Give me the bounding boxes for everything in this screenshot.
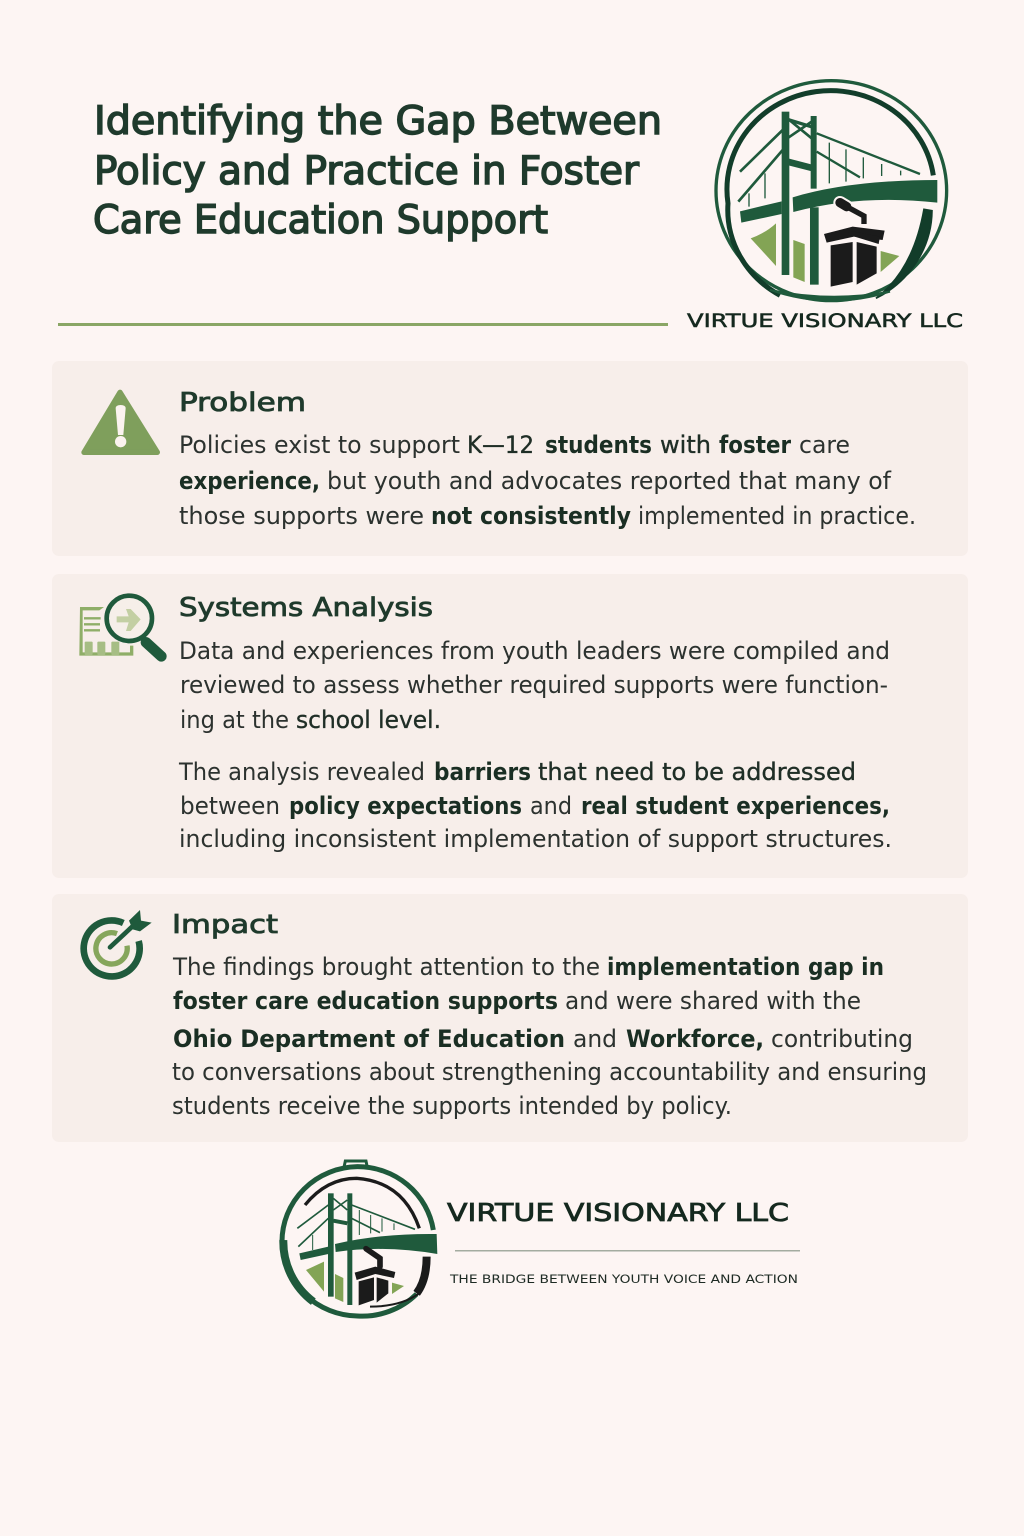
heading: impact: Impact [172,910,278,940]
title: Identifying the Gap Between [94,99,662,144]
systems analysis text: reviewed to assess whether required supports were function- [180,671,888,699]
panel: systems analysis [52,574,968,878]
logo wordmark: VIRTUE VISIONARY LLC [687,310,963,332]
impact text: Ohio Department of Education [173,1025,565,1053]
title: Policy and Practice in Foster [94,149,640,194]
systems analysis text: policy expectations [289,792,522,820]
icon: magnifier over report [79,596,161,656]
systems analysis text: between [180,792,280,820]
header divider [58,323,668,326]
systems analysis text: and [530,792,572,820]
heading: problem: Problem [179,388,306,418]
title: Care Education Support [93,198,548,243]
footer tagline: THE BRIDGE BETWEEN YOUTH VOICE AND ACTION [449,1272,798,1286]
title [93,99,662,243]
logo: bridge and podium emblem [716,81,947,301]
icon: warning triangle [84,392,157,452]
problem text: those supports were [179,502,424,530]
problem text: foster [719,431,791,459]
impact text: to conversations about strengthening accountability and ensuring [172,1058,927,1086]
problem text: not consistently [431,502,631,530]
impact text: The findings brought attention to the [172,953,600,981]
systems analysis text: that need to be addressed [538,758,856,786]
systems analysis text: Data and experiences from youth leaders were compiled and [179,637,890,665]
impact text: contributing [771,1025,913,1053]
systems analysis text: including inconsistent implementation of support structures. [179,825,892,853]
problem text: K—12 [467,431,534,459]
problem text: with [660,431,711,459]
panel: problem [52,361,968,556]
problem text: Policies exist to support [179,431,460,459]
icon: target with arrow [84,910,152,976]
problem text: experience, [179,467,320,495]
systems analysis text: school level. [296,706,441,734]
systems analysis text [178,637,892,853]
problem text: implemented in practice. [638,502,916,530]
problem text: care [799,431,850,459]
problem text: but youth and advocates reported that many of [327,467,892,495]
heading: systems analysis: Systems Analysis [179,593,433,623]
impact text: and were shared with the [565,987,861,1015]
systems analysis text: barriers [434,758,531,786]
panel: impact [52,894,968,1142]
footer logo emblem [282,1161,437,1316]
footer divider [455,1250,800,1252]
impact text: Workforce, [626,1025,764,1053]
impact text: implementation gap in [607,953,884,981]
impact text: students receive the supports intended by policy. [172,1092,732,1120]
problem text [179,431,916,530]
footer wordmark: VIRTUE VISIONARY LLC [447,1198,789,1227]
problem text: students [545,431,652,459]
impact text: and [573,1025,617,1053]
impact text [172,953,927,1120]
systems analysis text: ing at the [180,706,289,734]
systems analysis text: real student experiences, [581,792,890,820]
systems analysis text: The analysis revealed [178,758,425,786]
impact text: foster care education supports [173,987,558,1015]
